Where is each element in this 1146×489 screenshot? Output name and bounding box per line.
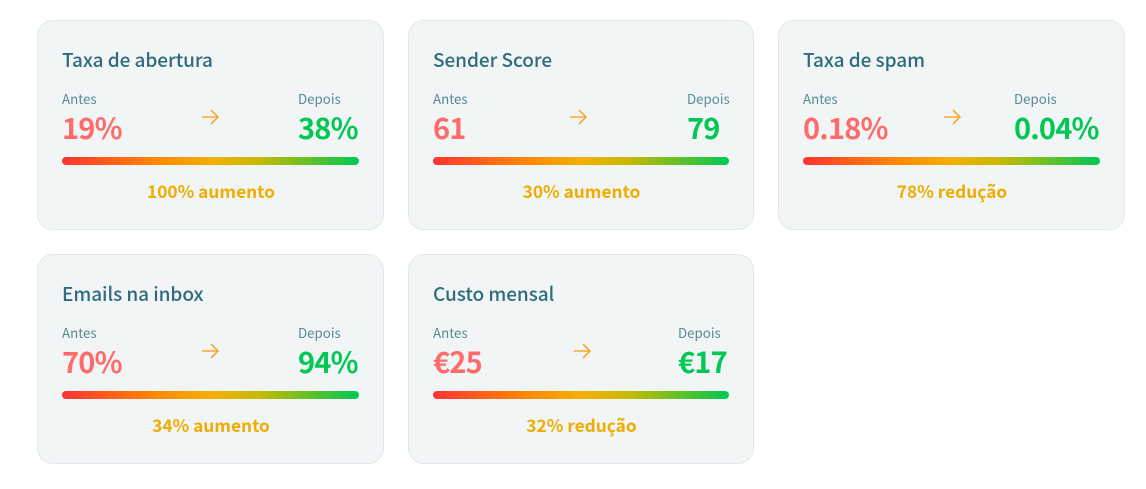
- heading: Sender Score: [433, 46, 552, 73]
- gradient bar: [803, 157, 1100, 165]
- heading: Emails na inbox: [62, 280, 203, 307]
- change: 34% aumento: [152, 412, 270, 437]
- heading: Custo mensal: [433, 280, 554, 307]
- label: antes: Antes: [803, 89, 838, 108]
- label: depois: Depois: [298, 89, 341, 108]
- icon: arrow: [202, 343, 219, 359]
- value: antes: 0.18%: [803, 106, 888, 148]
- panel: Taxa de spam: [778, 20, 1125, 230]
- label: depois: Depois: [298, 323, 341, 342]
- gradient bar: [433, 391, 729, 399]
- icon: arrow: [570, 109, 587, 125]
- value: depois: 79: [687, 106, 720, 148]
- label: antes: Antes: [433, 323, 468, 342]
- gradient bar: [62, 157, 359, 165]
- value: antes: 70%: [62, 340, 122, 382]
- icon: arrow: [202, 109, 219, 125]
- value: depois: 0.04%: [1014, 106, 1099, 148]
- panel: Emails na inbox: [37, 254, 384, 464]
- heading: Taxa de abertura: [62, 46, 213, 73]
- change: 78% redução: [897, 178, 1007, 203]
- value: depois: 94%: [298, 340, 358, 382]
- panel: Taxa de abertura: [37, 20, 384, 230]
- value: antes: €25: [433, 340, 482, 382]
- value: antes: 61: [433, 106, 466, 148]
- change: 100% aumento: [147, 178, 275, 203]
- label: antes: Antes: [62, 323, 97, 342]
- value: depois: 38%: [298, 106, 358, 148]
- label: depois: Depois: [1014, 89, 1057, 108]
- panel: Sender Score: [408, 20, 754, 230]
- change: 30% aumento: [523, 178, 640, 203]
- value: depois: €17: [678, 340, 727, 382]
- heading: Taxa de spam: [803, 46, 925, 73]
- value: antes: 19%: [62, 106, 122, 148]
- label: antes: Antes: [62, 89, 97, 108]
- gradient bar: [433, 157, 729, 165]
- change: 32% redução: [526, 412, 637, 437]
- icon: arrow: [574, 343, 591, 359]
- gradient bar: [62, 391, 359, 399]
- label: depois: Depois: [687, 89, 730, 108]
- panel: Custo mensal: [408, 254, 754, 464]
- label: antes: Antes: [433, 89, 468, 108]
- icon: arrow: [944, 109, 961, 125]
- label: depois: Depois: [678, 323, 721, 342]
